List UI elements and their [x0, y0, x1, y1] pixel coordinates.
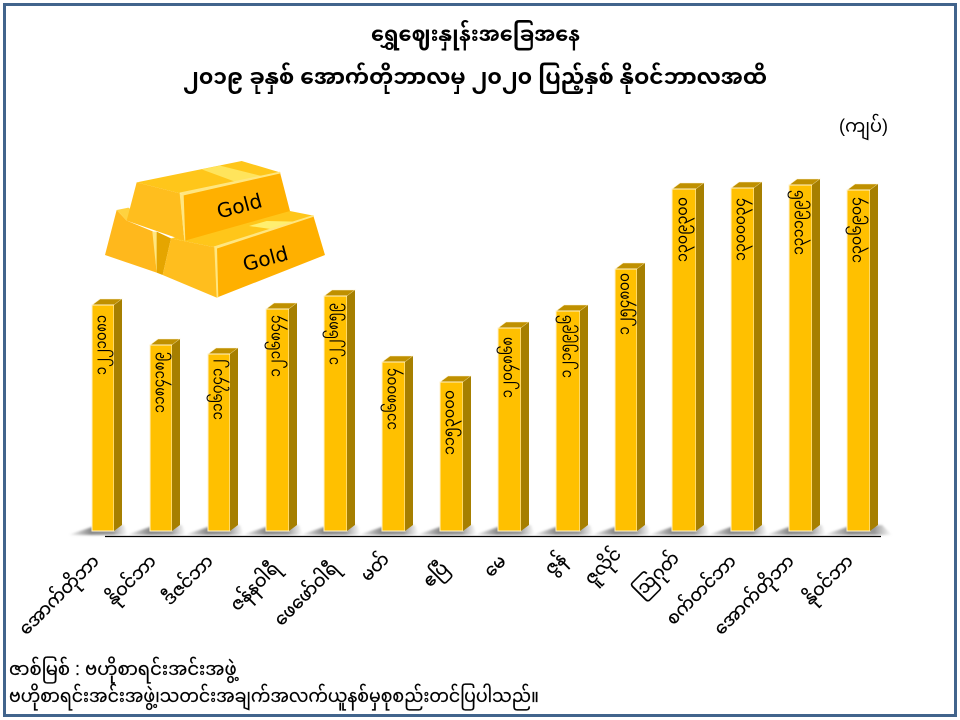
label: February: ဖေဖော်ဝါရီ: [267, 554, 346, 633]
bar: November 2020: [846, 184, 878, 531]
label: May: မေ: [480, 551, 510, 581]
bar: May 2020: ၁၂၀၄၈၆၈: [497, 337, 519, 398]
bar: September 2020: ၁၃၀၀၀၃၄: [732, 198, 752, 261]
label: August: ဩဂုတ်: [627, 546, 686, 604]
axis line: [105, 536, 881, 538]
bar: October 2020: ၁၃၁၁၉၉၆: [788, 190, 810, 255]
bar: March 2020: ၁၁၆၈၀၀၄: [381, 368, 403, 430]
bar: May 2020: [497, 322, 529, 531]
bar: July 2020: ၁၂၅၄၈၀၀: [616, 273, 636, 335]
label: November 2020: နိုဝင်ဘာ: [796, 548, 860, 612]
bar: June 2020: ၁၂၁၅၉၉၆: [556, 315, 578, 378]
label: November: နိုဝင်ဘာ: [99, 548, 163, 612]
source note: [9, 655, 539, 711]
label: December: ဒီဇင်ဘာ: [156, 548, 217, 609]
bar: November 2020: ၁၃၀၆၉၀၄: [846, 197, 868, 263]
chart floor shadows: [68, 525, 892, 535]
label: June: ဇွန်: [538, 547, 573, 582]
bar: October 2019: ၁၂၂၁၀၈၁: [93, 315, 113, 375]
bar: March 2020: [381, 356, 413, 531]
bar: February 2020: ၁၂၂၆၈၅၉: [323, 303, 345, 365]
bar: April 2020: [440, 376, 471, 531]
bar chart: [92, 179, 878, 531]
bar: September 2020: [731, 182, 762, 531]
gold label top: Gold: [214, 188, 265, 223]
icon: gold bars: [105, 161, 325, 298]
bar: June 2020: [556, 305, 588, 531]
month axis labels: [12, 541, 860, 642]
bar: January 2020: [265, 303, 297, 531]
gold label bottom: Gold: [240, 241, 291, 276]
bar: December 2019: ၁၁၆၇၄၁၂: [207, 359, 229, 420]
title line 2: ၂၀၁၉ ခုနှစ် အောက်တိုဘာလမှ ၂၀၂၀ ပြည့်နှစ် နိုဝင်ဘာလအထိ: [183, 61, 767, 94]
label: April: ဧပြီ: [416, 555, 455, 594]
label: July: ဇူလိုင်: [577, 541, 628, 592]
title line 1: ရွှေဈေးနှုန်းအခြေအနေ: [371, 18, 580, 51]
bar: October 2019: [92, 299, 122, 531]
title: [183, 18, 767, 94]
label: October 2020: အောက်တိုဘာ: [707, 548, 801, 642]
source line 2: ဗဟိုစာရင်းအင်းအဖွဲ့၊သတင်းအချက်အလက်ယူနစ်မှစုစည်းတင်ပြပါသည်။: [9, 682, 539, 711]
source line 1: ဇာစ်မြစ် : ဗဟိုစာရင်းအင်းအဖွဲ့: [9, 655, 239, 684]
bar: July 2020: [615, 263, 645, 531]
bar: August 2020: ၁၃၀၉၃၀၀: [674, 197, 694, 262]
label: January: ဇန်နဝါရီ: [223, 554, 287, 618]
bar: November 2019: [150, 339, 180, 531]
unit label: (ကျပ်): [839, 113, 888, 141]
label: March: မတ်: [354, 547, 393, 585]
bar: December 2019: [207, 348, 238, 531]
bar: November 2019: ၁၁၈၄၁၈၉: [151, 352, 171, 413]
bar: January 2020: ၁၂၁၆၈၄၄: [265, 315, 287, 377]
bar: February 2020: [323, 290, 355, 531]
bar: April 2020: ၁၁၅၃၀၀၀: [441, 390, 461, 455]
label: October: အောက်တိုဘာ: [12, 548, 106, 642]
label: September: စက်တင်ဘာ: [660, 549, 740, 629]
bar: October 2020: [788, 179, 820, 531]
bar: August 2020: [672, 183, 704, 531]
